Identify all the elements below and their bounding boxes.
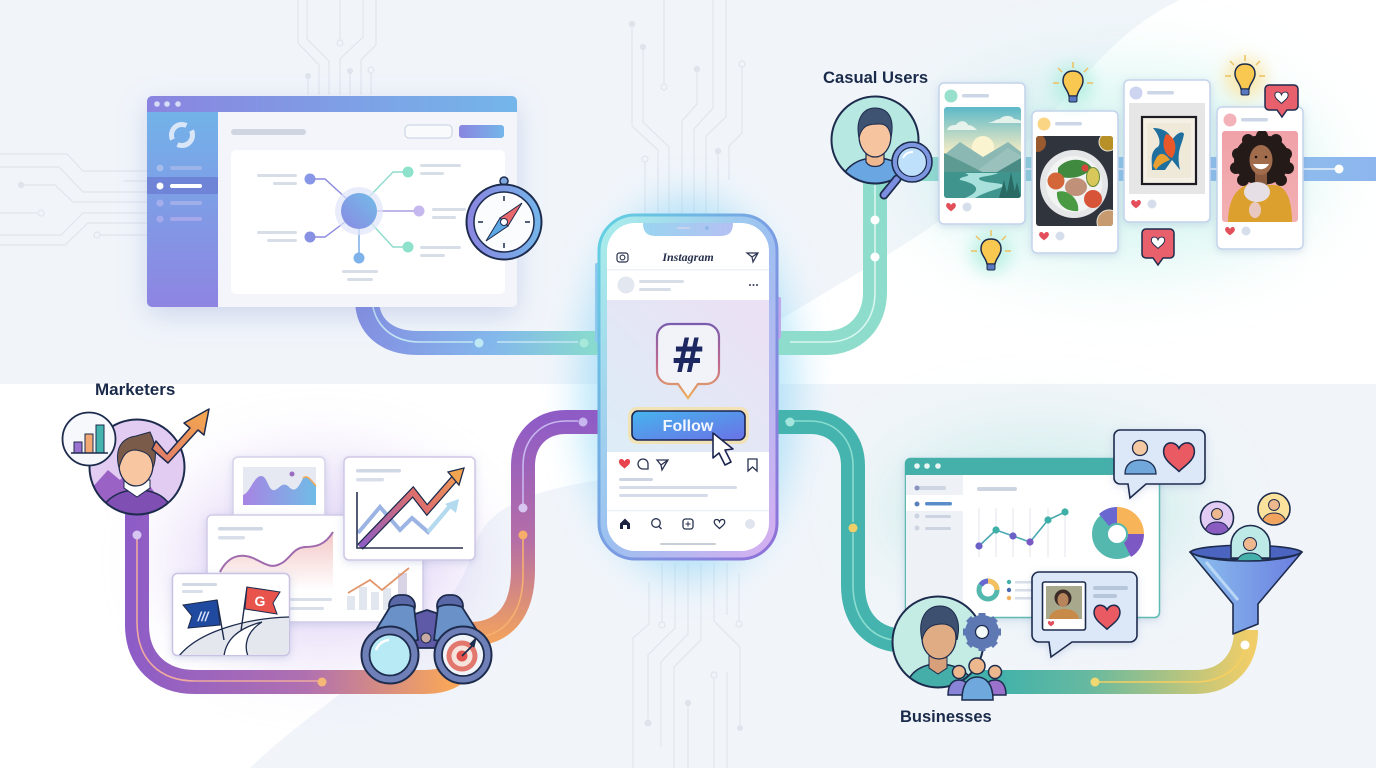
follow button: Follow [663,418,714,435]
speech bubble: influencer post [1032,572,1137,657]
icon: heart badge upper [1265,85,1298,117]
post card: landscape [939,83,1025,224]
icon: magnifying glass [884,142,932,195]
persona: casual user with magnifier [832,96,932,195]
label: businesses: Businesses [900,708,992,726]
speech bubble: audience and heart [1114,430,1205,498]
notch [643,223,733,236]
connector: businesses to funnel [960,630,1250,686]
icon: gear [963,613,1001,651]
icon: heart badge lower [1142,229,1174,265]
icon: team of people [948,658,1006,700]
panel: dashboard browser window [147,96,542,307]
app header: Instagram [661,250,714,264]
post header [618,276,758,294]
panel: business analytics browser [905,458,1160,618]
icon: compass [466,177,542,260]
connector: phone to casual users [778,175,880,343]
post card: framed art [1124,80,1210,222]
persona: business owner with gear and team [892,596,1006,700]
icon: growth arrow [152,409,209,463]
hashtag speech bubble: # [671,328,705,384]
chart card: competitor flags [172,574,290,656]
sidebar menu [147,164,218,222]
bottom navigation [607,510,769,545]
icon: light bulb lower [971,230,1011,273]
panel: phone with Instagram screen [595,215,781,559]
hub-and-spoke diagram card [231,150,505,294]
connector: compass dashboard to phone [367,300,600,348]
label: marketers: Marketers [95,380,175,399]
icon: light bulb top centre [1053,62,1093,105]
persona: marketer with growth arrow [62,409,209,515]
connector: phone to marketers [132,418,600,686]
chart card: rising arrow line chart [344,457,475,560]
donut chart [1099,507,1144,557]
toolbar [231,125,504,138]
post card: food plate [1028,111,1121,253]
icon: funnel with user avatars [1190,493,1302,634]
small donut and legend [979,580,1035,600]
connector: casual users post feed [895,157,1376,181]
avatar: teal user [1231,526,1270,564]
chart card: competitor flags: G [255,593,266,609]
avatar: purple user [1200,502,1234,534]
line chart [975,508,1069,557]
hashtag speech bubble [657,324,719,398]
chart card: growth curve [207,515,423,622]
post action icons [619,459,757,497]
analytics sidebar [906,475,963,616]
icon: cursor [713,433,733,465]
post card: smiling woman portrait [1217,107,1303,249]
chart card: area chart [233,457,325,521]
connector: phone to businesses [776,418,895,640]
icon: light bulb upper right [1225,55,1265,98]
avatar: yellow user [1258,493,1290,525]
icon: bar chart circle [62,412,116,466]
logo ring [171,124,193,146]
label: casual users: Casual Users [823,68,928,87]
follow button [628,407,749,444]
chart card: competitor flags: /// [197,609,210,624]
icon: binoculars with target [362,595,492,684]
app header [607,250,769,270]
